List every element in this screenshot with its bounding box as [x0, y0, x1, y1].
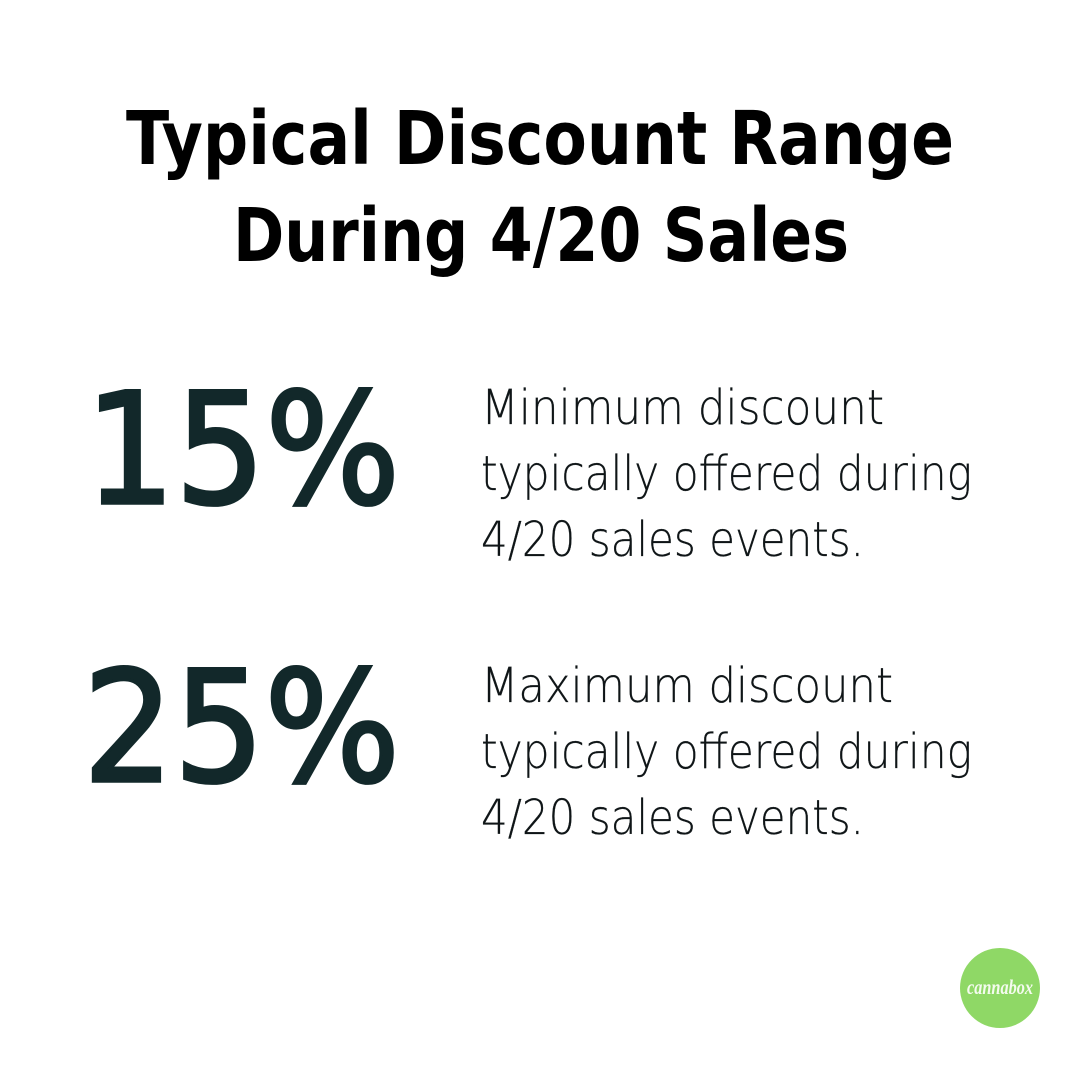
text: minimum discount description: typically offered during — [481, 446, 972, 502]
logo: cannabox badge: cannabox — [967, 975, 1033, 999]
text: minimum discount description — [481, 380, 972, 568]
text: maximum discount description: Maximum discount — [481, 658, 893, 714]
title: Typical Discount Range — [126, 96, 954, 182]
logo: cannabox badge — [960, 948, 1040, 1028]
stat: 15% value: 15% — [85, 361, 400, 540]
text: maximum discount description — [481, 658, 972, 846]
text: maximum discount description: 4/20 sales events. — [481, 790, 864, 846]
stat: 25% value: 25% — [83, 639, 400, 818]
text: minimum discount description: 4/20 sales events. — [481, 512, 864, 568]
title: During 4/20 Sales — [233, 193, 849, 279]
title — [126, 96, 954, 279]
text: minimum discount description: Minimum discount — [481, 380, 884, 436]
text: maximum discount description: typically offered during — [481, 724, 972, 780]
